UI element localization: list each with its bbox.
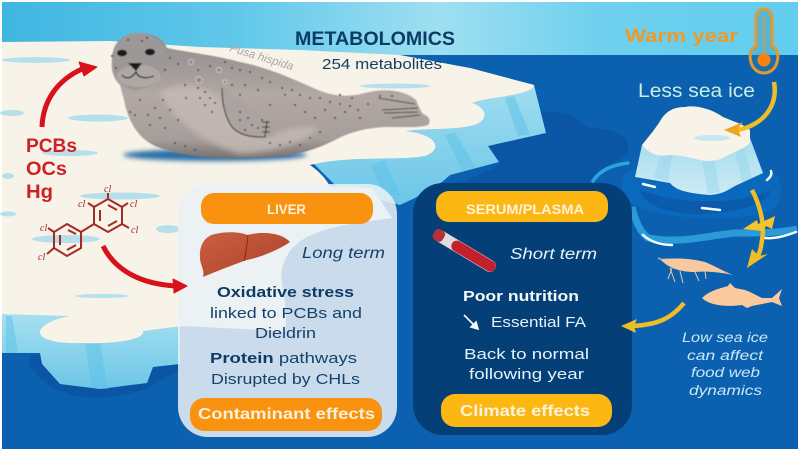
seal body	[112, 33, 430, 158]
label PCBs: PCBs	[26, 136, 77, 157]
icon: shrimp	[658, 258, 733, 283]
icon: fish	[702, 283, 782, 308]
seal eyes	[117, 49, 155, 56]
seal nose	[128, 63, 142, 71]
thermometer bulb	[758, 54, 770, 66]
arrow: molecule to liver	[103, 246, 187, 293]
pill: contaminant effects	[190, 398, 382, 431]
less sea ice label: Less sea ice	[638, 81, 755, 102]
pill: climate effects	[441, 394, 612, 427]
arrow shaft	[752, 190, 763, 258]
icon: liver	[200, 232, 290, 277]
title	[295, 29, 455, 73]
iceberg top	[642, 106, 750, 161]
text: disrupted by CHLs: Disrupted by CHLs	[211, 371, 360, 388]
caption line 3: food web	[691, 365, 761, 380]
pill: serum plasma	[436, 191, 608, 222]
icon: blood test tube	[431, 227, 498, 274]
pill: liver	[201, 193, 373, 224]
lightning break	[743, 216, 775, 231]
iceberg side	[635, 138, 763, 195]
text: Dieldrin: Dieldrin	[255, 325, 316, 342]
thermometer outline	[750, 9, 778, 73]
text: protein pathways: Protein pathways	[210, 350, 357, 367]
light ripple strokes	[593, 163, 628, 181]
pill text: contaminant effects: Contaminant effects	[198, 406, 375, 423]
text: back to normal: Back to normal	[464, 346, 589, 363]
shrimp legs	[658, 258, 706, 283]
arrow: fish to serum panel	[621, 303, 684, 333]
iceberg puddle	[694, 135, 730, 141]
seal spots	[112, 38, 392, 150]
PCB molecule diagram	[38, 184, 138, 263]
arrow head	[747, 249, 768, 268]
label Hg: Hg	[26, 182, 53, 203]
arrow shaft	[632, 303, 684, 326]
seal mouth	[122, 72, 154, 78]
thermometer stem	[763, 16, 765, 54]
panel: serum and plasma	[413, 183, 632, 435]
ice surface	[2, 41, 534, 343]
seal tail lines	[378, 98, 420, 118]
tube glass	[432, 228, 498, 274]
floe ice streaks	[6, 96, 530, 389]
main ice floe	[0, 41, 546, 389]
puddles on ice	[0, 57, 430, 298]
caption line 4: dynamics	[689, 383, 762, 398]
seal flipper outline	[222, 88, 270, 137]
biphenyl rings	[47, 193, 129, 256]
background: sky	[2, 2, 798, 62]
arrow head	[724, 122, 743, 137]
text: long term: Long term	[302, 245, 385, 262]
caption line 2: can affect	[687, 348, 765, 363]
chlorine labels: cl	[38, 252, 45, 263]
food web caption	[682, 330, 768, 398]
floe side walls	[310, 68, 546, 205]
seal illustration	[112, 33, 430, 158]
seal head	[112, 33, 167, 90]
tube blood	[449, 239, 498, 274]
warm year label: Warm year	[625, 25, 738, 46]
iceberg streaks	[654, 148, 752, 194]
lower floe side wall	[2, 313, 180, 389]
panel: liver	[178, 184, 397, 437]
chlorine labels	[38, 184, 138, 263]
pill text: serum plasma: SERUM/PLASMA	[466, 202, 584, 217]
text: poor nutrition: Poor nutrition	[463, 288, 579, 305]
seal shadow	[123, 149, 307, 161]
contaminants list	[26, 136, 77, 203]
chlorine labels: cl	[78, 199, 85, 210]
background: dark water shadows	[30, 112, 628, 398]
icon: thermometer	[750, 9, 778, 73]
tube cap	[431, 227, 447, 243]
species name: Pusa hispida	[228, 42, 295, 73]
liver lobe line	[244, 235, 248, 261]
water pool	[621, 163, 781, 218]
seal muzzle	[117, 65, 161, 87]
seal flipper	[222, 88, 267, 137]
chlorine labels: cl	[131, 225, 138, 236]
label OCs: OCs	[26, 159, 67, 180]
chlorine labels: cl	[40, 223, 47, 234]
heading: metabolomics: METABOLOMICS	[295, 29, 455, 50]
chlorine labels: cl	[130, 199, 137, 210]
icon: down arrow	[464, 315, 478, 329]
shrimp body	[660, 258, 733, 275]
seal belly light patch	[160, 85, 320, 154]
panel background	[178, 184, 397, 437]
arrow head	[621, 319, 637, 333]
lower ripple band	[632, 207, 797, 240]
text: following year: following year	[469, 366, 584, 383]
pill text: liver: LIVER	[267, 202, 306, 217]
white foam marks	[643, 171, 796, 245]
arrow: iceberg to food web	[743, 190, 775, 268]
caption line 1: Low sea ice	[682, 330, 768, 345]
seal ring spots	[188, 60, 227, 84]
text: short term: Short term	[510, 246, 597, 263]
chlorine labels: cl	[104, 184, 111, 195]
panel background	[413, 183, 632, 435]
arrow: contaminants to seal	[42, 62, 97, 127]
small melting iceberg	[593, 106, 797, 245]
text: linked to PCBs and: linked to PCBs and	[210, 305, 362, 322]
dark ripple	[640, 190, 770, 214]
text: oxidative stress: Oxidative stress	[217, 284, 354, 301]
text: essential FA: Essential FA	[491, 314, 586, 331]
subheading: metabolite count: 254 metabolites	[322, 56, 442, 73]
pill text: climate effects: Climate effects	[460, 403, 590, 420]
arrow: thermometer to iceberg	[724, 82, 775, 137]
arrow shaft	[738, 82, 775, 130]
